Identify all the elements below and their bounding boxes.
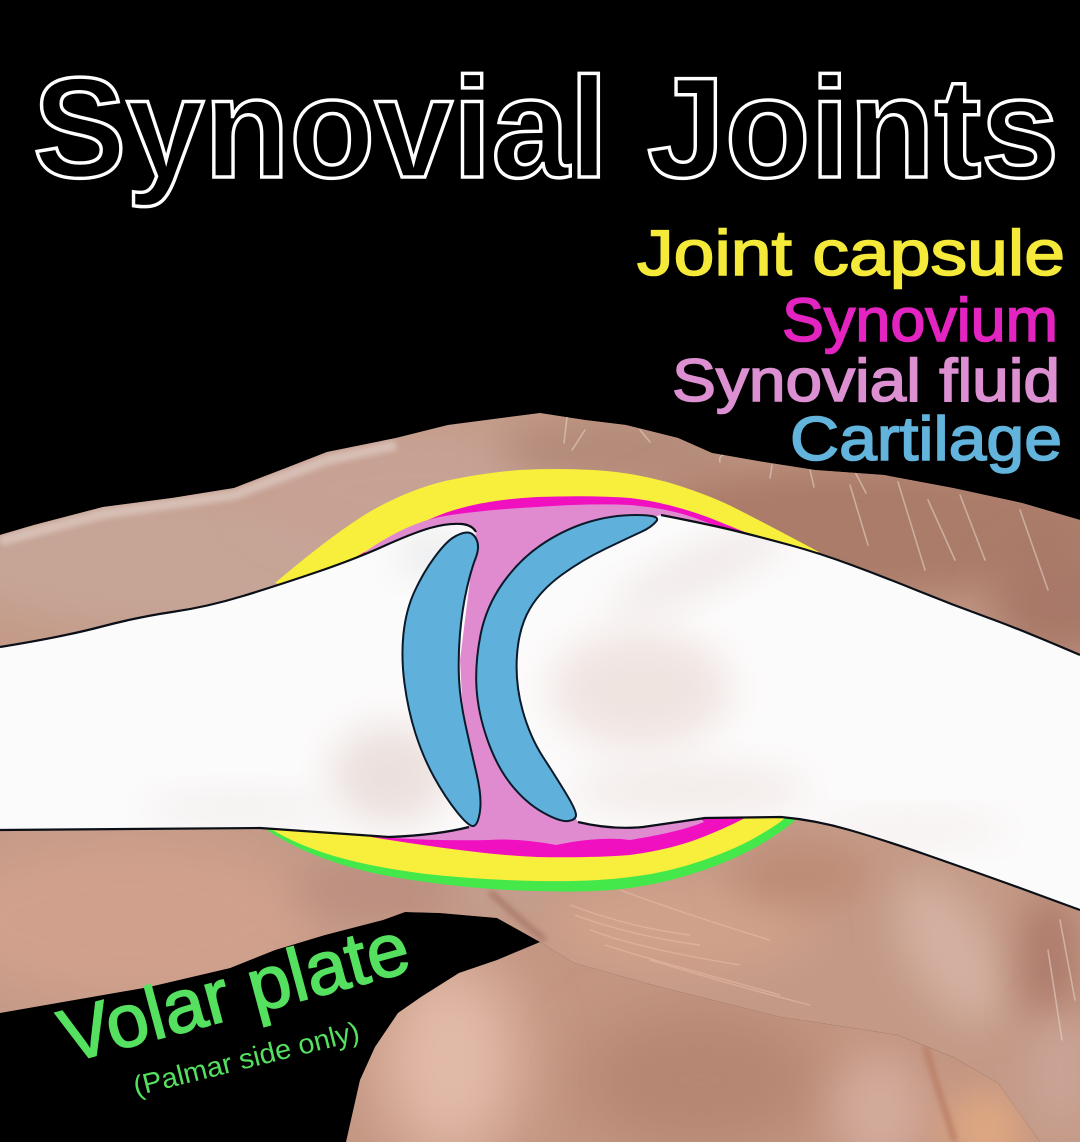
label: joint capsule: Joint capsule [637,217,1065,289]
joint capsule: dorsal [275,469,819,620]
cartilage: left [402,532,481,826]
label: synovial fluid: Synovial fluid [672,347,1060,414]
title: Synovial Joints [33,49,1059,208]
bone outlines [0,515,1080,910]
label: palmar side only: (Palmar side only) [130,1016,363,1102]
second finger [346,942,1040,1142]
ridges: palmar [570,890,810,1005]
label: cartilage: Cartilage [790,405,1062,474]
synovium: dorsal [354,496,752,600]
crease: palmar [490,892,545,940]
finger skin [0,413,1080,1142]
synovial fluid [365,504,745,845]
bones [0,510,1080,910]
legend [637,217,1065,474]
cartilage: right [476,515,657,821]
wrinkles: dorsal right [564,417,1075,1040]
volar plate [267,800,796,892]
dorsal shading [0,480,324,624]
palmar shading [0,840,320,1000]
label: volar plate: Volar plate [50,905,418,1078]
joint capsule: palmar [271,800,785,881]
synovium: palmar [371,800,745,857]
highlight along top edge [0,445,396,541]
label: synovium: Synovium [782,286,1058,354]
